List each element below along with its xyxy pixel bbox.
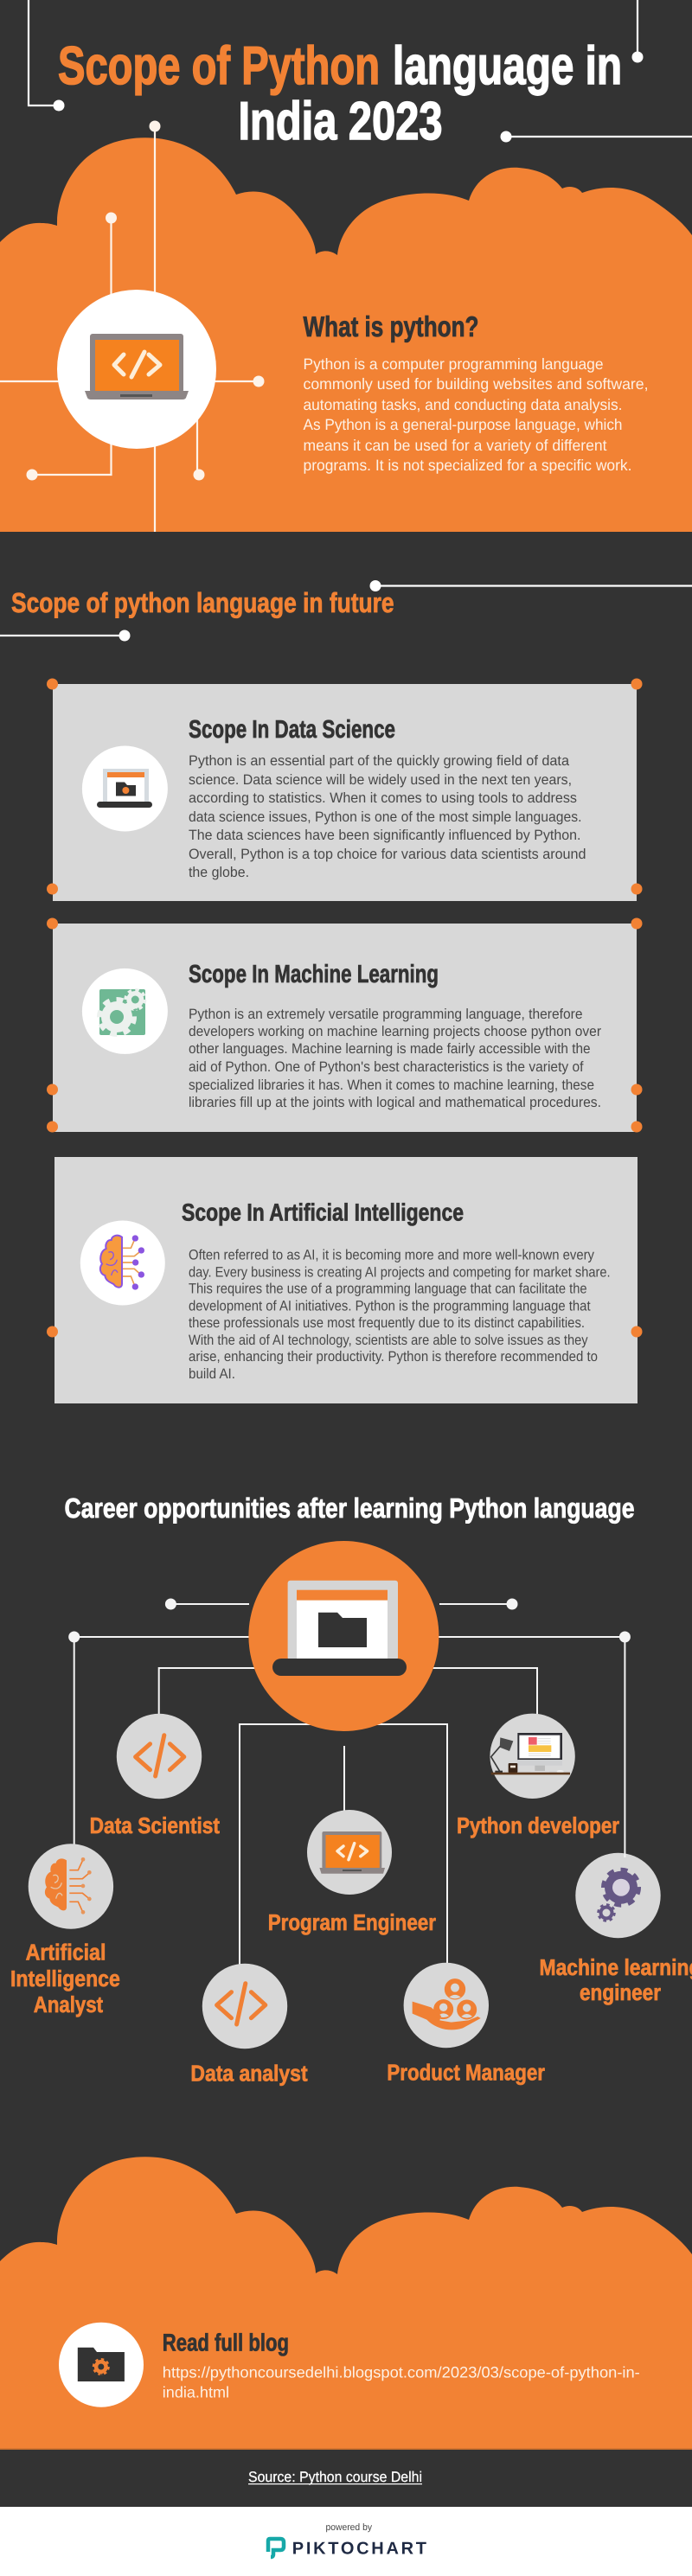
text: data science body: science. Data science will be widely used in the next ten years, bbox=[189, 772, 572, 788]
footer: piktochart bbox=[0, 2507, 692, 2576]
label: engineer bbox=[580, 1979, 661, 2005]
text: what is python body bbox=[303, 355, 649, 474]
heading: scope in machine learning: Scope In Machine Learning bbox=[189, 961, 439, 988]
label: Product Manager bbox=[387, 2060, 545, 2086]
panel: scope in machine learning bbox=[47, 918, 642, 1133]
career: data scientist bbox=[90, 1714, 220, 1838]
text: data science body: the globe. bbox=[189, 865, 249, 880]
text: data science body: according to statistics. When it comes to using tools to address bbox=[189, 790, 577, 806]
text: blog link: https://pythoncoursedelhi.blogspot.com/2023/03/scope-of-python-in- bbox=[163, 2363, 640, 2381]
text: machine learning body: libraries fill up at the joints with logical and mathematical procedures. bbox=[189, 1095, 601, 1110]
title: language in bbox=[393, 36, 622, 96]
icon: hand holding people bbox=[413, 1978, 481, 2029]
career: python developer bbox=[457, 1714, 619, 1838]
icon: code bbox=[217, 1984, 266, 2024]
icon: laptop with code bbox=[57, 290, 216, 449]
icon: laptop folder bbox=[82, 745, 168, 832]
heading: read full blog: Read full blog bbox=[163, 2329, 289, 2355]
connector nub bbox=[624, 1637, 625, 1857]
text: blog link: india.html bbox=[163, 2384, 229, 2401]
heading: scope in data science: Scope In Data Science bbox=[189, 716, 395, 744]
label: Intelligence bbox=[10, 1966, 120, 1991]
footer: piktochart: powered by bbox=[325, 2522, 372, 2533]
icon: piktochart logo bbox=[268, 2539, 284, 2557]
panel: read full blog cloud bbox=[0, 2157, 692, 2450]
icon: laptop bbox=[319, 1831, 385, 1874]
icon: orange brain bbox=[45, 1857, 92, 1914]
text: what is python body: As Python is a general-purpose language, which bbox=[303, 416, 623, 433]
text: machine learning body: developers working on machine learning projects choose python over bbox=[189, 1024, 601, 1039]
text: machine learning body: specialized libraries it has. When it comes to machine learning, these bbox=[189, 1077, 594, 1093]
text: machine learning body: other languages. Machine learning is made fairly accessible with the bbox=[189, 1041, 591, 1057]
career: data analyst bbox=[190, 1964, 308, 2087]
icon: purple gears bbox=[599, 1870, 638, 1921]
text: artificial intelligence body: these professionals use most frequently due to its distinct capabilities. bbox=[189, 1315, 585, 1331]
label: Data analyst bbox=[190, 2061, 308, 2087]
icon: folder with gear bbox=[59, 2323, 144, 2407]
text: what is python body: commonly used for building websites and software, bbox=[303, 375, 649, 393]
label: Program Engineer bbox=[268, 1909, 436, 1935]
text: what is python body: means it can be used for a variety of different bbox=[303, 437, 607, 454]
text: data science body bbox=[189, 753, 586, 880]
panel: what is python cloud bbox=[0, 121, 692, 532]
text: data science body: Overall, Python is a top choice for various data scientists around bbox=[189, 847, 586, 862]
text: machine learning body bbox=[189, 1007, 601, 1110]
career: machine learning engineer bbox=[540, 1637, 692, 2005]
career: artificial intelligence analyst bbox=[10, 1844, 120, 2017]
text: data science body: data science issues, Python is one of the most simple languages. bbox=[189, 809, 581, 825]
text: artificial intelligence body: With the aid of AI technology, scientists are able to solve issues as they bbox=[189, 1333, 588, 1348]
icon: green gears bbox=[82, 968, 168, 1054]
icon: desk with monitor and lamp bbox=[491, 1733, 570, 1774]
title: India 2023 bbox=[239, 92, 443, 151]
title: Scope of Python bbox=[58, 36, 380, 96]
icon: code bbox=[136, 1735, 184, 1776]
text: artificial intelligence body: Often referred to as AI, it is becoming more and more well-known every bbox=[189, 1248, 595, 1263]
icon: purple brain bbox=[80, 1221, 165, 1306]
text: what is python body: programs. It is not specialized for a specific work. bbox=[303, 457, 631, 474]
text: artificial intelligence body: This requires the use of a programming language that can facilitate the bbox=[189, 1282, 587, 1297]
heading: scope in artificial intelligence: Scope In Artificial Intelligence bbox=[182, 1199, 464, 1226]
text: artificial intelligence body: day. Every business is creating AI projects and competing for market share. bbox=[189, 1265, 611, 1281]
text: data science body: Python is an essential part of the quickly growing field of data bbox=[189, 753, 570, 769]
panel: scope in artificial intelligence bbox=[47, 1157, 642, 1403]
career: product manager bbox=[387, 1963, 545, 2086]
label: Artificial bbox=[26, 1940, 106, 1966]
text: artificial intelligence body: development of AI initiatives. Python is the programming language that bbox=[189, 1299, 591, 1314]
text: artificial intelligence body bbox=[189, 1248, 611, 1382]
icon: central laptop folder bbox=[248, 1541, 439, 1731]
label: Analyst bbox=[34, 1991, 103, 2017]
text: machine learning body: Python is an extremely versatile programming language, therefore bbox=[189, 1007, 583, 1022]
wordmark: PIKTOCHART bbox=[292, 2539, 426, 2558]
career: program engineer bbox=[268, 1810, 436, 1935]
text: blog link bbox=[163, 2363, 640, 2401]
text: machine learning body: aid of Python. One of Python's best characteristics is the variety of bbox=[189, 1059, 584, 1075]
text: what is python body: automating tasks, and conducting data analysis. bbox=[303, 396, 623, 413]
section connector lines bbox=[0, 580, 692, 642]
circuit lines around laptop bbox=[0, 121, 265, 532]
career connector lines bbox=[68, 1598, 631, 1965]
text: artificial intelligence body: arise, enhancing their productivity. Python is therefore recommended to bbox=[189, 1349, 598, 1365]
panel: scope in data science bbox=[47, 678, 642, 901]
heading: what is python: What is python? bbox=[303, 310, 479, 342]
label: Python developer bbox=[457, 1812, 619, 1838]
text: data science body: The data sciences have been significantly influenced by Python. bbox=[189, 828, 581, 843]
top decorative circuit lines bbox=[29, 0, 692, 142]
label bbox=[540, 1954, 692, 2005]
heading: scope of python language in future: Scope of python language in future bbox=[11, 587, 394, 618]
text: artificial intelligence body: build AI. bbox=[189, 1366, 235, 1382]
source line: Source: Python course Delhi bbox=[248, 2469, 422, 2485]
label bbox=[10, 1940, 120, 2017]
label: Data Scientist bbox=[90, 1812, 220, 1838]
text: what is python body: Python is a computer programming language bbox=[303, 355, 604, 373]
title bbox=[58, 36, 622, 151]
